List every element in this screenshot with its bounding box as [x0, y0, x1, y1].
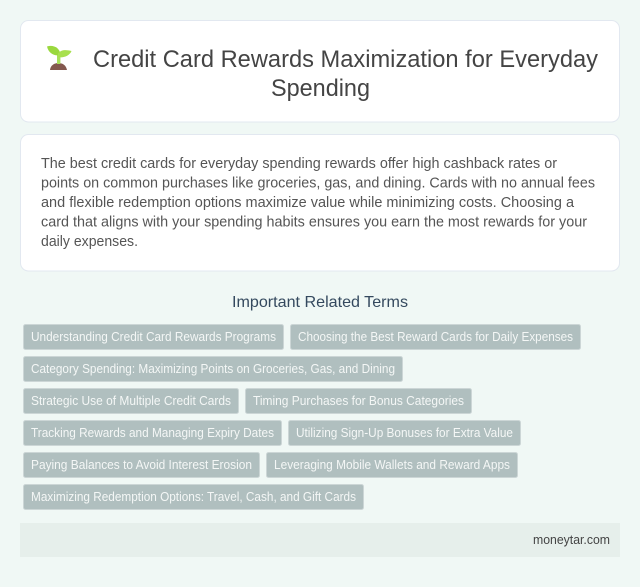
tag 7	[288, 420, 520, 446]
tag 5	[246, 388, 472, 414]
tag 1: Understanding Credit Card Rewards Programs	[31, 330, 276, 344]
tag 2	[290, 324, 580, 350]
tag 5: Timing Purchases for Bonus Categories	[253, 394, 464, 408]
heading: important related terms: Important Related Terms	[232, 294, 408, 311]
title: Credit Card Rewards Maximization for Everyday	[93, 46, 598, 73]
tag 6: Tracking Rewards and Managing Expiry Dates	[31, 426, 274, 440]
title: Spending	[271, 75, 370, 102]
tag 8	[24, 452, 260, 478]
icon: seedling	[47, 46, 72, 70]
text block: description: card that aligns with your spending habits ensures you earn the most rewards for your	[41, 214, 587, 230]
text block: description: points on common purchases like groceries, gas, and dining. Cards with no annual fees	[41, 174, 595, 192]
title	[93, 46, 598, 102]
panel: title card	[20, 20, 620, 122]
tag 3: Category Spending: Maximizing Points on Groceries, Gas, and Dining	[31, 362, 395, 376]
tag 9	[266, 452, 518, 478]
tag 4	[24, 388, 238, 414]
text block: description: The best credit cards for everyday spending rewards offer high cashback rates or	[41, 155, 557, 172]
tag 10: Maximizing Redemption Options: Travel, Cash, and Gift Cards	[31, 490, 356, 504]
text block: description: and flexible redemption options maximize value while minimizing costs. Choosing a	[41, 194, 575, 211]
tag list	[24, 324, 580, 510]
tag 10	[24, 484, 364, 510]
panel: description card	[20, 134, 620, 271]
tag 2: Choosing the Best Reward Cards for Daily Expenses	[298, 330, 573, 344]
tag 4: Strategic Use of Multiple Credit Cards	[31, 394, 231, 408]
tag 1	[24, 324, 284, 350]
tag 6	[24, 420, 282, 446]
tag 8: Paying Balances to Avoid Interest Erosion	[31, 458, 252, 472]
text block: description: daily expenses.	[41, 233, 138, 250]
tag 9: Leveraging Mobile Wallets and Reward Apps	[274, 458, 510, 472]
footer: moneytar.com	[533, 533, 610, 547]
footer	[20, 523, 620, 557]
tag 7: Utilizing Sign-Up Bonuses for Extra Value	[296, 426, 513, 440]
text block: description	[41, 155, 595, 250]
tag 3	[24, 356, 402, 382]
